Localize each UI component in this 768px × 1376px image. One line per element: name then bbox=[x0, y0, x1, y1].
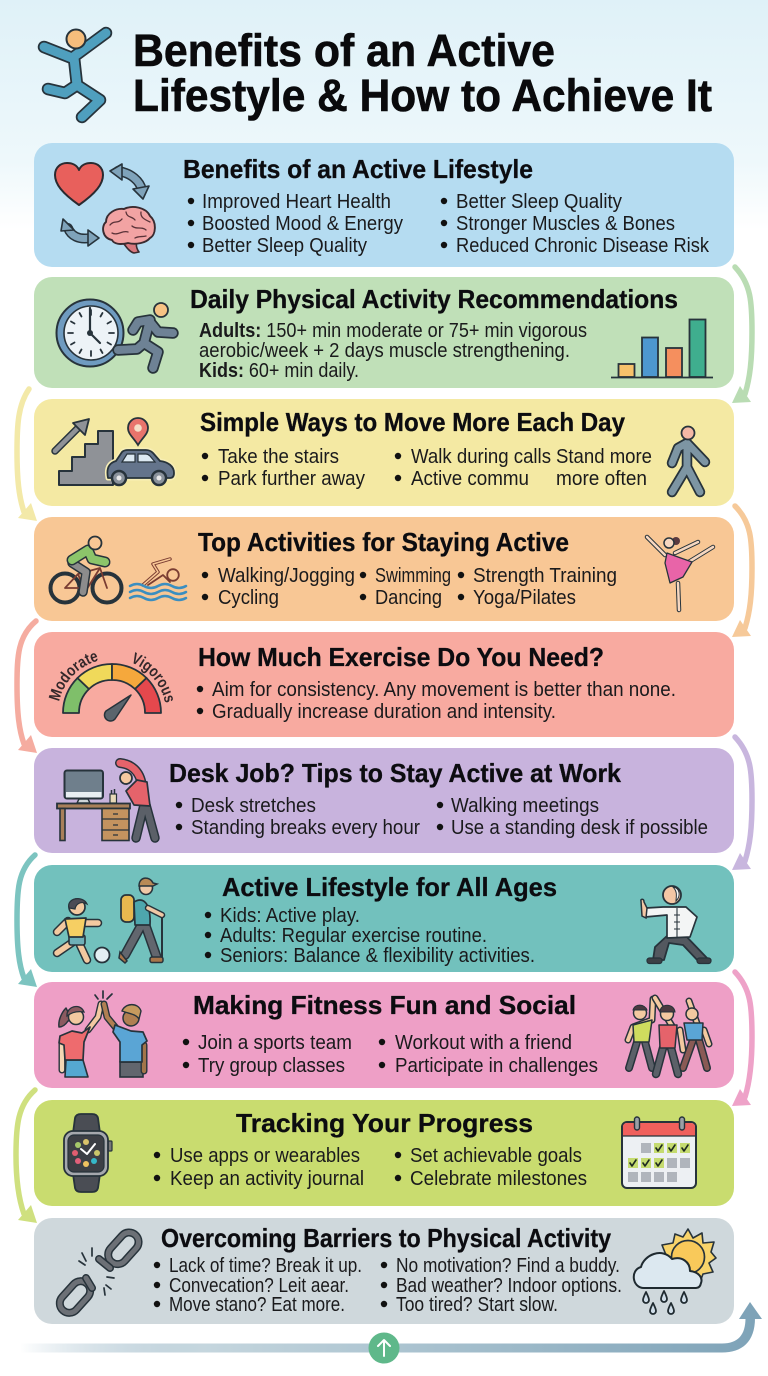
list: barriers bbox=[154, 1255, 622, 1316]
icon: intensity gauge: Vigorous bbox=[134, 652, 173, 702]
list: activities: Strength Training bbox=[473, 565, 617, 587]
list: simple ways: Park further away bbox=[218, 468, 365, 490]
list: benefits bbox=[188, 191, 710, 257]
icon: walking person bbox=[672, 426, 705, 492]
list: ages bbox=[205, 905, 535, 967]
list: benefits: Better Sleep Quality bbox=[202, 235, 367, 257]
icon: heart, brain and cycle arrows bbox=[55, 163, 155, 253]
list: simple ways: Walk during calls bbox=[411, 446, 551, 468]
list: benefits: Stronger Muscles & Bones bbox=[456, 213, 675, 235]
panel: simple ways bbox=[34, 399, 734, 506]
list: barriers: Too tired? Start slow. bbox=[396, 1294, 558, 1316]
heading: Desk Job? Tips to Stay Active at Work bbox=[169, 758, 622, 788]
list: desk tips bbox=[176, 795, 708, 839]
list: social ideas: Participate in challenges bbox=[395, 1055, 598, 1077]
title: Benefits of an Active bbox=[133, 25, 555, 76]
list: exercise guidance: Gradually increase duration and intensity. bbox=[212, 701, 556, 723]
list: barriers: No motivation? Find a buddy. bbox=[396, 1255, 620, 1277]
list: exercise guidance: Aim for consistency. Any movement is better than none. bbox=[212, 679, 676, 701]
list: tracking tips: Use apps or wearables bbox=[170, 1145, 360, 1167]
list: barriers: Lack of time? Break it up. bbox=[169, 1255, 362, 1277]
icon: group of friends bbox=[628, 998, 709, 1074]
panel: all ages bbox=[34, 865, 734, 972]
arrow: simple ways to top activities bbox=[732, 506, 752, 637]
list: desk tips: Standing breaks every hour bbox=[191, 817, 420, 839]
heading: Tracking Your Progress bbox=[236, 1108, 533, 1138]
list: benefits: Better Sleep Quality bbox=[456, 191, 622, 213]
icon: broken chain bbox=[56, 1229, 142, 1317]
list: activities: Dancing bbox=[375, 587, 442, 609]
panel: daily recommendations bbox=[34, 277, 734, 388]
list: barriers: Convecation? Leit aear. bbox=[169, 1275, 349, 1297]
list: activities: Yoga/Pilates bbox=[473, 587, 576, 609]
list: tracking tips: Celebrate milestones bbox=[410, 1168, 587, 1190]
arrow: all ages to fun and social bbox=[732, 972, 752, 1106]
arrow: bottom return loop bbox=[20, 1302, 762, 1352]
heading: Overcoming Barriers to Physical Activity bbox=[161, 1223, 611, 1253]
title bbox=[133, 25, 712, 121]
icon: sun, cloud and rain bbox=[634, 1229, 716, 1314]
arrow: recommendations to simple ways bbox=[17, 389, 37, 521]
heading: Active Lifestyle for All Ages bbox=[222, 872, 557, 902]
panel: tracking progress bbox=[34, 1100, 734, 1206]
text: adults and kids guidance: aerobic/week + 2 days muscle strengthening. bbox=[199, 340, 570, 362]
icon: clock and runner bbox=[56, 300, 173, 368]
list: simple ways: Take the stairs bbox=[218, 446, 339, 468]
heading: Simple Ways to Move More Each Day bbox=[200, 407, 625, 437]
text: adults and kids guidance: Adults: 150+ min moderate or 75+ min vigorous bbox=[199, 320, 587, 342]
icon: jumping person bbox=[44, 30, 106, 117]
bar chart bbox=[611, 320, 713, 378]
list: ages: Kids: Active play. bbox=[220, 905, 360, 927]
icon: intensity gauge: Modorate bbox=[48, 653, 98, 701]
icon: intensity gauge bbox=[48, 652, 173, 722]
arrow: exercise needs to desk job bbox=[732, 737, 752, 870]
heading: Top Activities for Staying Active bbox=[198, 527, 569, 557]
heading: How Much Exercise Do You Need? bbox=[198, 642, 604, 672]
list: benefits: Improved Heart Health bbox=[202, 191, 391, 213]
icon: smartwatch bbox=[64, 1114, 112, 1192]
list: ages: Seniors: Balance & flexibility activities. bbox=[220, 945, 535, 967]
text: adults and kids guidance bbox=[199, 320, 587, 382]
list: tracking tips: Keep an activity journal bbox=[170, 1168, 364, 1190]
list: desk tips: Desk stretches bbox=[191, 795, 316, 817]
list: activities: Cycling bbox=[218, 587, 279, 609]
arrow: fun and social to tracking bbox=[16, 1090, 37, 1223]
arrow: benefits to recommendations bbox=[732, 267, 752, 403]
list: barriers: Bad weather? Indoor options. bbox=[396, 1275, 622, 1297]
icon: desk and stretching worker bbox=[57, 763, 155, 840]
list: activities: Walking/Jogging bbox=[218, 565, 355, 587]
icon: calendar bbox=[622, 1117, 696, 1188]
heading: Benefits of an Active Lifestyle bbox=[183, 154, 533, 184]
list: social ideas bbox=[183, 1032, 598, 1077]
list: simple ways bbox=[202, 446, 652, 490]
list: benefits: Reduced Chronic Disease Risk bbox=[456, 235, 710, 257]
text: adults and kids guidance: Kids: 60+ min daily. bbox=[199, 360, 359, 382]
icon: tai chi senior bbox=[641, 886, 711, 964]
heading: Daily Physical Activity Recommendations bbox=[190, 284, 678, 314]
list: desk tips: Walking meetings bbox=[451, 795, 599, 817]
panel: how much exercise bbox=[34, 632, 734, 737]
icon: dancer bbox=[647, 537, 713, 610]
list: social ideas: Try group classes bbox=[198, 1055, 345, 1077]
list: social ideas: Join a sports team bbox=[198, 1032, 352, 1054]
heading: Making Fitness Fun and Social bbox=[193, 990, 576, 1020]
icon: stairs, arrow, pin and car bbox=[55, 418, 174, 485]
panel: fun and social bbox=[34, 982, 734, 1088]
list: tracking tips: Set achievable goals bbox=[410, 1145, 582, 1167]
list: simple ways: Stand more bbox=[556, 446, 652, 468]
panel: benefits bbox=[34, 143, 734, 267]
list: barriers: Move stano? Eat more. bbox=[169, 1294, 345, 1316]
icon: child with ball and hiker bbox=[57, 878, 163, 963]
list: social ideas: Workout with a friend bbox=[395, 1032, 572, 1054]
icon: cyclist and swimmer bbox=[50, 536, 186, 602]
list: exercise guidance bbox=[197, 679, 676, 723]
list: ages: Adults: Regular exercise routine. bbox=[220, 925, 487, 947]
list: desk tips: Use a standing desk if possible bbox=[451, 817, 708, 839]
arrow: desk job to all ages bbox=[17, 855, 37, 987]
list: activities: Swimming bbox=[375, 565, 451, 587]
panel: desk job bbox=[34, 748, 734, 853]
list: activities bbox=[202, 565, 617, 609]
panel: overcoming barriers bbox=[34, 1218, 734, 1324]
icon: high five bbox=[59, 991, 147, 1077]
panel: top activities bbox=[34, 517, 734, 621]
list: benefits: Boosted Mood & Energy bbox=[202, 213, 403, 235]
list: simple ways: more often bbox=[556, 468, 647, 490]
icon: green up arrow badge bbox=[368, 1332, 400, 1364]
list: simple ways: Active commu bbox=[411, 468, 529, 490]
list: tracking tips bbox=[154, 1145, 587, 1190]
title: Lifestyle & How to Achieve It bbox=[133, 70, 712, 121]
arrow: top activities to exercise needs bbox=[17, 621, 37, 753]
